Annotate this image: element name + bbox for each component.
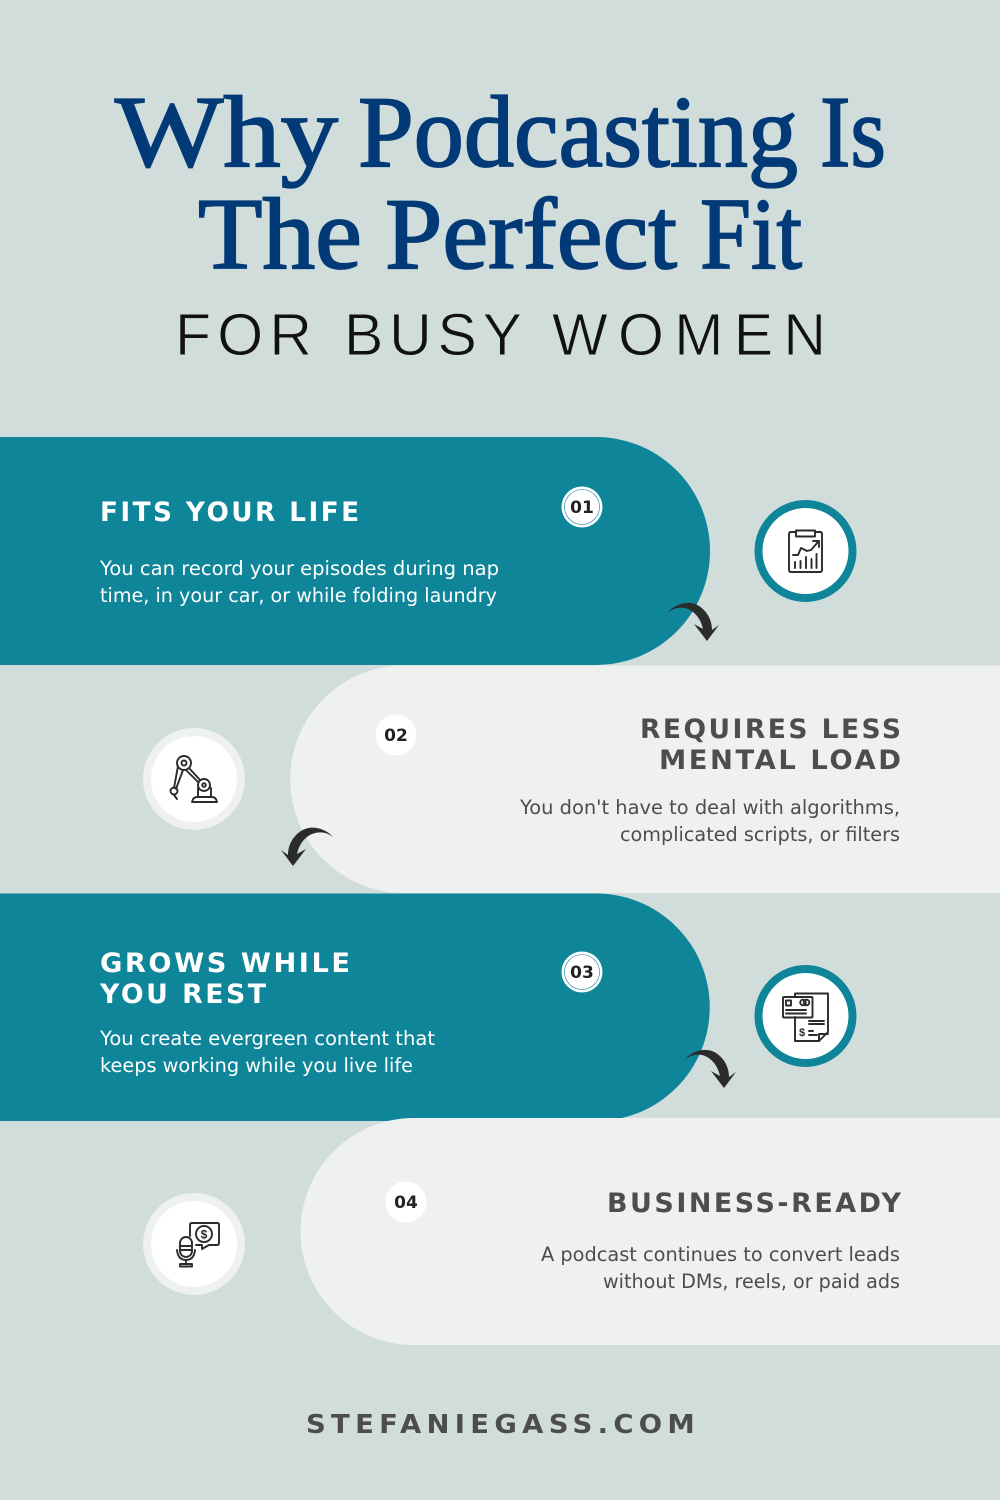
arrow 3 <box>684 1050 736 1088</box>
title: The <box>198 178 362 291</box>
heading 2: REQUIRES LESS <box>640 714 904 745</box>
title: Why <box>115 76 338 189</box>
number badge 03: 03 <box>570 963 594 983</box>
number badge 01 <box>562 486 602 528</box>
body text 3 <box>99 1027 435 1077</box>
number badge 04: 04 <box>394 1193 418 1213</box>
footer website: STEFANIEGASS.COM <box>306 1410 700 1440</box>
body text 3: You create evergreen content that <box>99 1027 435 1050</box>
body text 4: A podcast continues to convert leads <box>541 1243 900 1266</box>
heading 2 <box>640 714 904 776</box>
icon: microphone with money speech bubble: $ <box>201 1228 208 1242</box>
icon: credit card and invoice <box>758 969 852 1063</box>
subtitle: FOR <box>175 302 312 368</box>
icon: credit card and invoice: $ <box>799 1027 805 1039</box>
arrow 2 <box>281 828 333 866</box>
icon: microphone with money speech bubble <box>147 1197 241 1291</box>
body text 1: time, in your car, or while folding laundry <box>100 584 497 607</box>
title: Podcasting <box>358 76 798 189</box>
body text 1 <box>99 557 499 607</box>
number badge 03 <box>562 952 602 992</box>
body text 2: complicated scripts, or filters <box>620 823 900 846</box>
body text 3: keeps working while you live life <box>100 1054 413 1077</box>
subtitle: BUSY <box>344 302 522 368</box>
subtitle: WOMEN <box>552 302 826 368</box>
title: Is <box>820 76 886 189</box>
number badge 02: 02 <box>384 726 408 746</box>
body text 1: You can record your episodes during nap <box>99 557 499 580</box>
heading 3: YOU REST <box>99 979 269 1010</box>
heading 4: BUSINESS-READY <box>607 1188 904 1219</box>
number badge 01: 01 <box>570 498 594 518</box>
body text 4 <box>541 1243 900 1293</box>
title: Fit <box>700 178 802 291</box>
title: Perfect <box>385 178 677 291</box>
arrow 1 <box>667 603 719 641</box>
icon: clipboard with growth chart <box>758 504 852 598</box>
heading 3 <box>99 948 353 1010</box>
heading 2: MENTAL LOAD <box>659 745 904 776</box>
panel 2: requires less mental load <box>290 666 1000 893</box>
body text 4: without DMs, reels, or paid ads <box>603 1270 900 1293</box>
heading 1: FITS YOUR LIFE <box>100 497 362 528</box>
body text 2 <box>519 796 900 846</box>
icon: robotic arm <box>147 732 241 826</box>
title <box>115 76 886 291</box>
number badge 02 <box>376 714 416 756</box>
heading 3: GROWS WHILE <box>100 948 352 979</box>
body text 2: You don't have to deal with algorithms, <box>519 796 900 819</box>
panel 4: business-ready <box>300 1118 1000 1345</box>
subtitle <box>175 302 826 368</box>
panel 3: grows while you rest <box>0 894 710 1121</box>
number badge 04 <box>386 1182 426 1222</box>
panel 1: fits your life <box>0 437 710 665</box>
